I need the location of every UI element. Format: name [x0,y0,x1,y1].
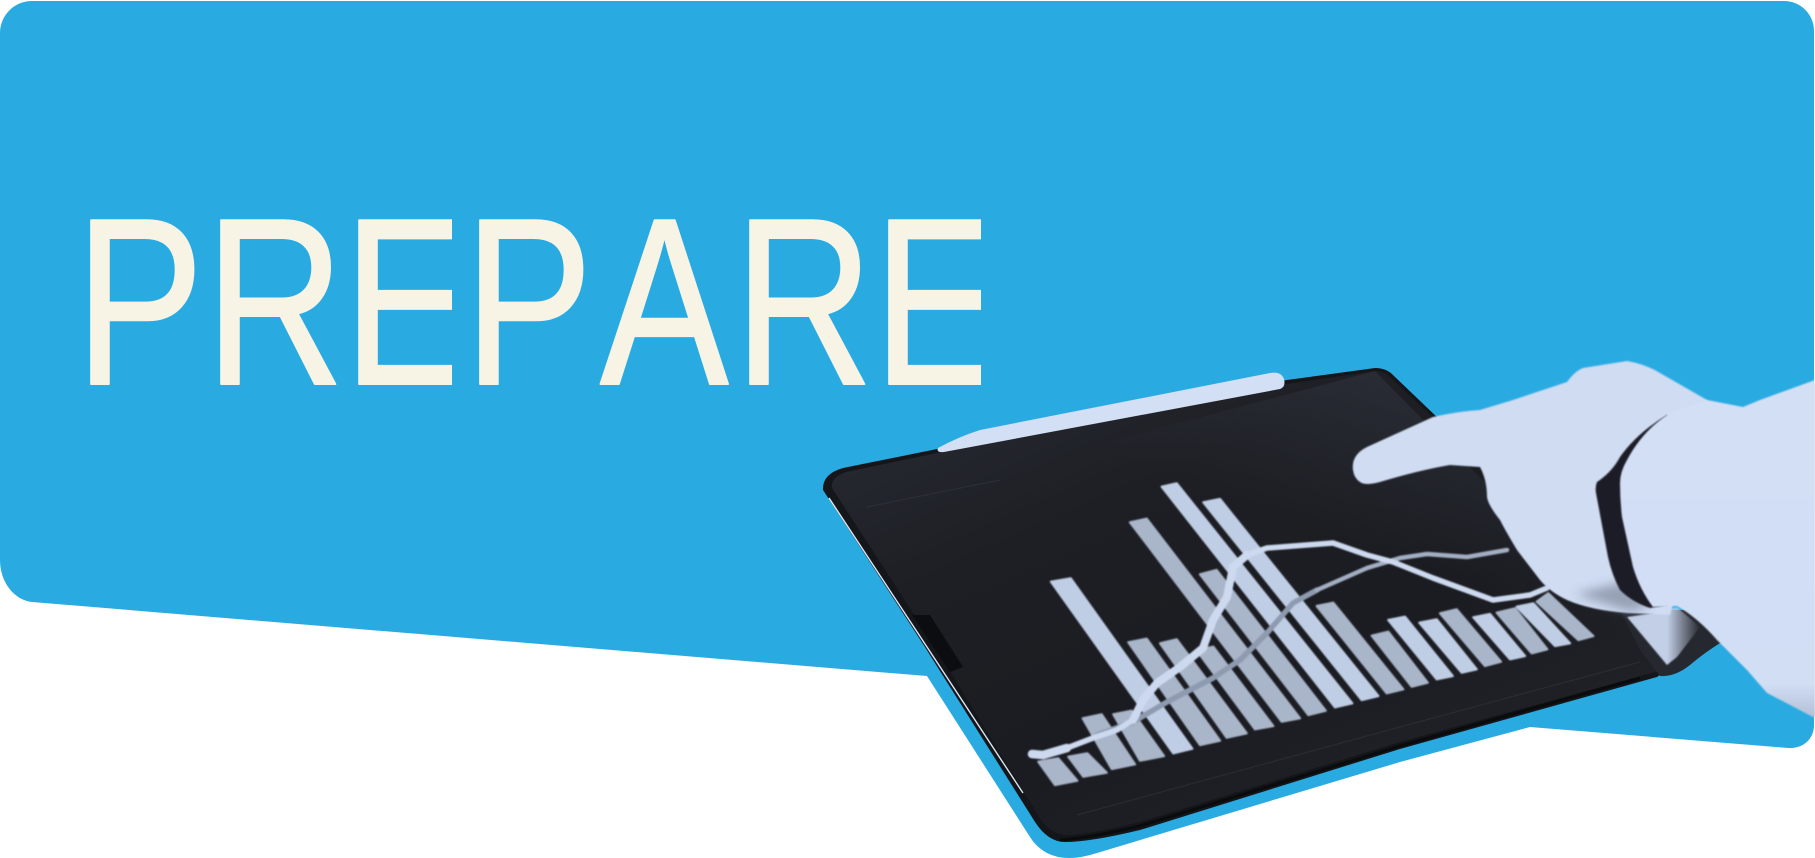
sleeve [1620,380,1815,717]
stylus pencil [938,373,1284,452]
tablet edge highlight [829,498,1023,793]
palm shadow wedge [1627,607,1700,665]
tablet side button [912,615,963,672]
bars dim [1038,519,1593,785]
shadow under palm [1620,610,1725,676]
illustration: pointing hand [1353,361,1815,717]
screen highlight [870,371,1640,640]
title: PREPARE [75,169,1002,435]
hand and finger [1353,361,1720,615]
secondary trend line [1097,550,1507,735]
tablet body [823,368,1680,842]
tablet lower rim [1060,678,1640,840]
screen inner frame [867,480,1640,815]
illustration: tablet with chart [823,368,1680,842]
bars bright [1051,483,1570,753]
tablet screen [832,371,1675,835]
primary trend line [1032,543,1547,755]
palm fade [1575,582,1650,612]
watch band [1596,415,1680,608]
bar chart [1032,483,1593,785]
